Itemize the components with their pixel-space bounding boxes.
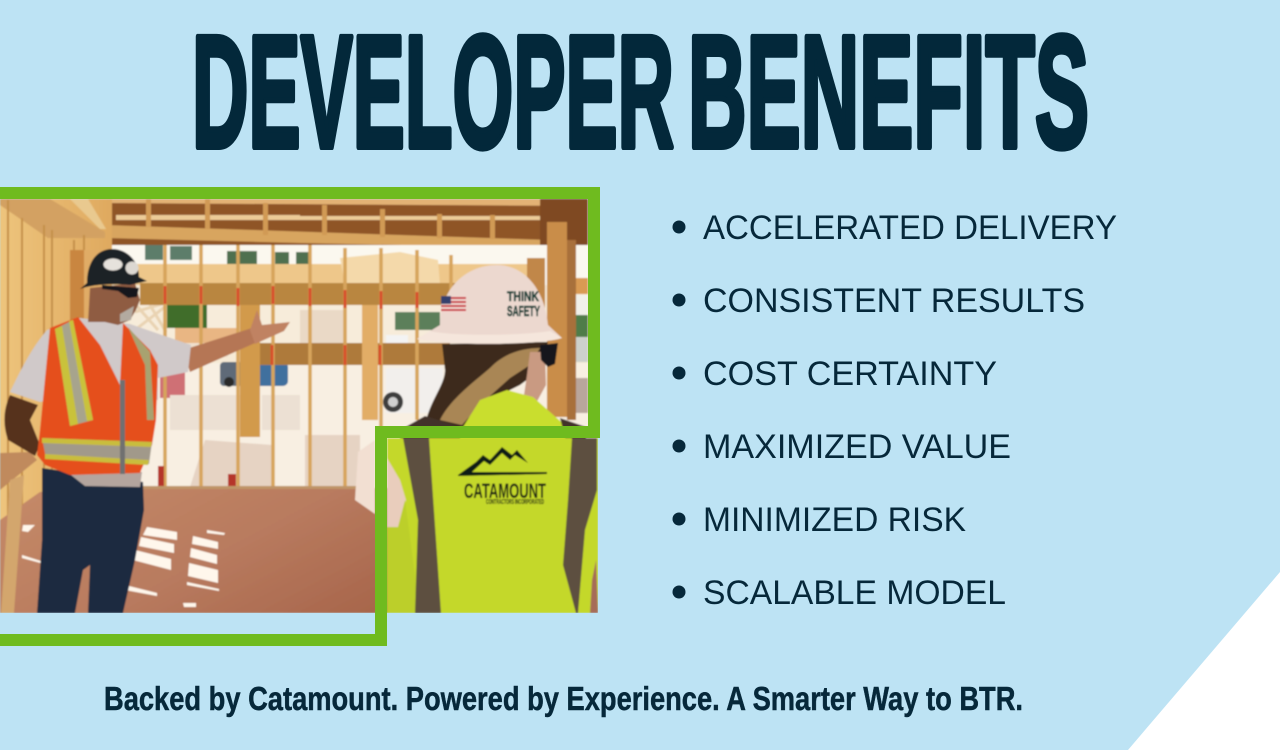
horizontal blocking beams (138, 282, 456, 366)
benefit 5: MINIMIZED RISK (703, 501, 966, 539)
right reflective strap (563, 438, 597, 613)
green photo frame (0, 193, 594, 640)
blue car and white truck (220, 295, 588, 413)
woman sleeve beside green frame (355, 440, 375, 514)
white hard hat (417, 265, 562, 344)
neon vest back (387, 438, 598, 613)
sunglasses (540, 343, 558, 367)
tagline: Backed by Catamount. Powered by Experience. A Smarter Way to BTR. (104, 680, 1023, 717)
left arm (4, 395, 40, 456)
ceiling framing (105, 199, 588, 248)
hair (426, 341, 548, 426)
left reflective strap (403, 438, 441, 613)
catamount wordmark: CATAMOUNT (464, 480, 546, 503)
floor with sun patches (0, 485, 388, 613)
photo: construction site walkthrough (0, 199, 598, 613)
benefit 1: ACCELERATED DELIVERY (703, 209, 1117, 247)
title: DEVELOPER (192, 2, 674, 181)
orange safety vest (37, 317, 158, 475)
white corner triangle (1128, 572, 1280, 750)
sunglasses (102, 285, 139, 298)
back wall opening (120, 303, 588, 488)
neon vest shoulders (459, 388, 566, 440)
vest reflective stripes (55, 320, 93, 426)
shirt tail (70, 471, 142, 488)
wide posts (240, 222, 576, 437)
woman hard hat and hair (400, 265, 586, 440)
upper yard view with trees (112, 245, 588, 294)
pants (37, 468, 144, 613)
benefits list (672, 209, 1117, 612)
outstretched arm and hand (183, 328, 255, 372)
benefit 4: MAXIMIZED VALUE (703, 428, 1011, 466)
benefit 3: COST CERTAINTY (703, 355, 997, 393)
benefit 6: SCALABLE MODEL (703, 574, 1006, 612)
catamount sub text: CONTRACTORS INCORPORATED (486, 499, 544, 506)
striped shirt (10, 318, 191, 402)
foreground wood sawhorse (0, 452, 37, 613)
inner sleeve (387, 458, 406, 527)
wall studs with red tape (158, 245, 451, 492)
hard hat (80, 249, 147, 289)
flag sticker (441, 296, 466, 313)
face (524, 352, 546, 405)
catamount mountain logo (458, 447, 547, 476)
face (88, 283, 140, 325)
man in orange vest (4, 249, 290, 613)
think safety text: THINK (507, 288, 539, 304)
plywood left wall (0, 199, 112, 520)
safety text: SAFETY (507, 303, 540, 320)
benefit 2: CONSISTENT RESULTS (703, 282, 1085, 320)
